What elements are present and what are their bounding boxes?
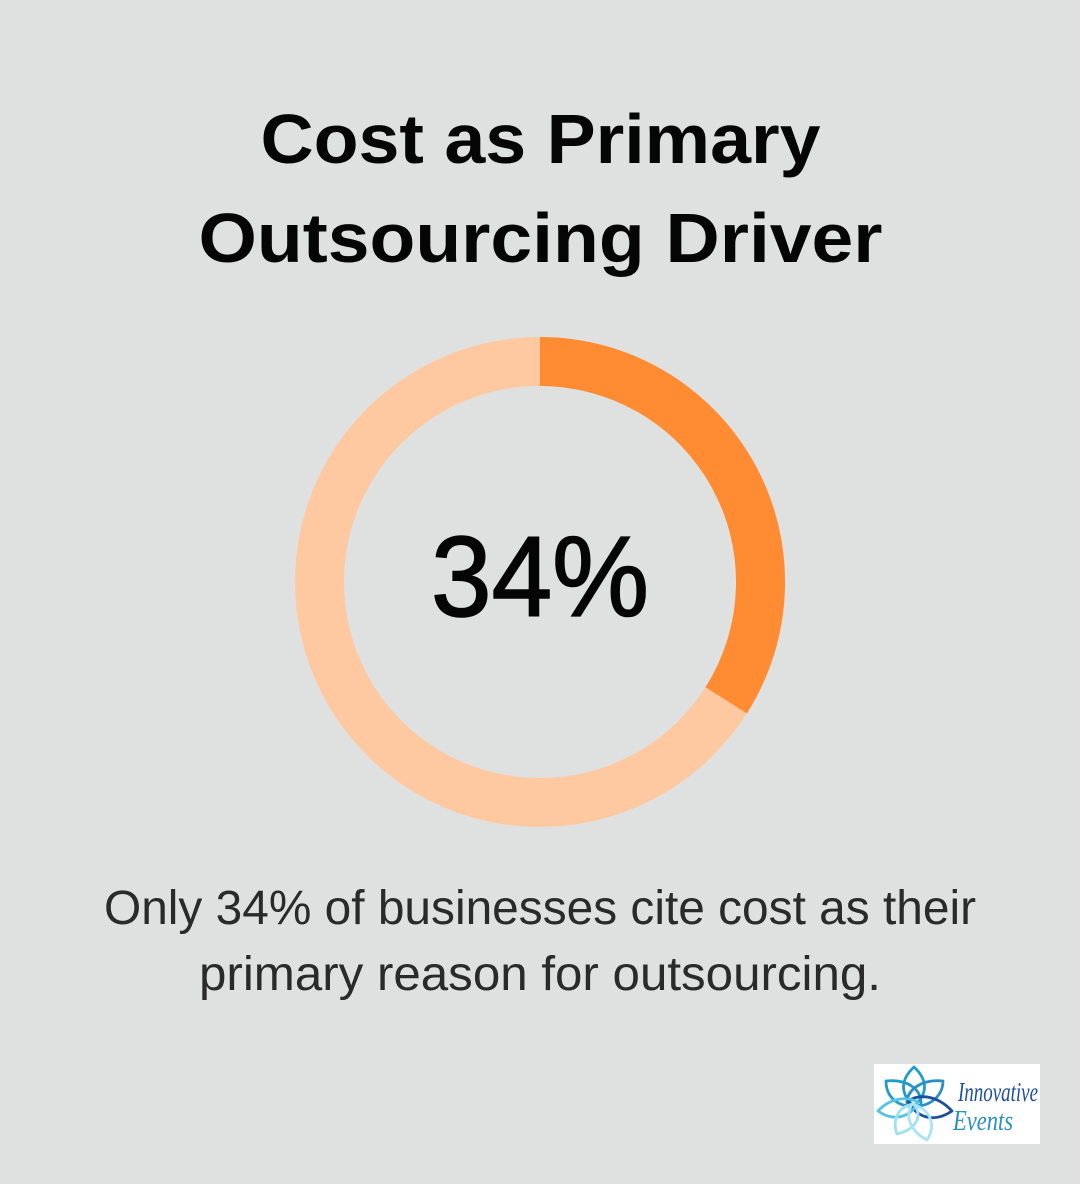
title: Outsourcing Driver bbox=[198, 199, 882, 277]
donut centre value: 34% bbox=[431, 514, 649, 641]
icon: lotus flower bbox=[878, 1067, 952, 1140]
title bbox=[198, 100, 882, 277]
donut chart: 34% bbox=[320, 362, 761, 802]
description text: primary reason for outsourcing. bbox=[199, 948, 881, 1001]
description text bbox=[104, 882, 976, 1001]
logo wordmark: Events bbox=[952, 1106, 1013, 1137]
title: Cost as Primary bbox=[260, 100, 821, 178]
logo: Innovative Events bbox=[874, 1064, 1040, 1144]
logo wordmark bbox=[952, 1077, 1038, 1137]
donut value arc bbox=[540, 362, 761, 700]
description text: Only 34% of businesses cite cost as their bbox=[104, 882, 976, 935]
donut track bbox=[320, 362, 760, 802]
logo wordmark: Innovative bbox=[957, 1077, 1038, 1107]
